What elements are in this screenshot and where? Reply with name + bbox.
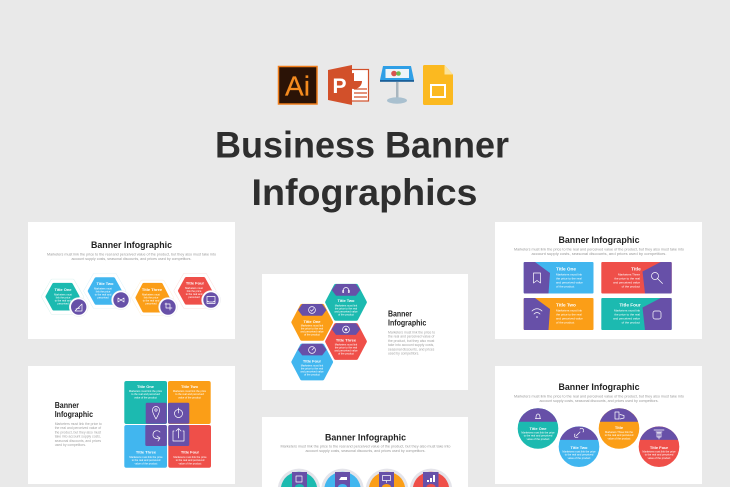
text block: take into account supply costs, <box>388 343 434 347</box>
hexagon: title two: Marketers must link <box>335 304 358 308</box>
hexagon: title three <box>132 281 178 316</box>
tile: title one <box>124 381 167 424</box>
icon: PowerPoint: P <box>332 75 347 98</box>
text block: the real and perceived value of <box>55 426 101 430</box>
hexagon: title one: of the product <box>304 332 320 336</box>
circle: title one: Title One <box>529 426 547 431</box>
hexagon: title one: perceived <box>57 302 69 306</box>
hexagon: title four: the price to the real <box>301 366 324 370</box>
text block: Marketers must link the price to <box>388 330 435 334</box>
card: title three: Title <box>631 266 641 272</box>
circle: title two <box>559 426 599 467</box>
card: title two <box>524 298 594 330</box>
circle: title one <box>518 408 558 449</box>
icon: Adobe Illustrator <box>278 66 317 104</box>
icon: Adobe Illustrator: Ai <box>285 70 310 102</box>
text block <box>514 246 684 256</box>
hexagon: title three: of the product <box>338 352 354 356</box>
card: title four: the price to the real <box>614 312 640 316</box>
circle: title four: value of the product <box>648 456 671 460</box>
text block: account supply costs, seasonal discounts, and prices used by competitors. <box>72 256 192 261</box>
tile: title two: value of the product <box>178 395 201 399</box>
hexagon: title two: the price to the real <box>335 306 358 310</box>
card: title four: and perceived value <box>613 316 640 320</box>
tile: title three: Title Three <box>136 450 157 454</box>
hexagon: title two <box>85 274 130 310</box>
tile: title two <box>168 381 211 424</box>
hexagon: title two <box>327 284 365 319</box>
heading <box>55 401 93 419</box>
circle: title four: Marketers must link the price <box>642 450 676 454</box>
hexagon: title one <box>42 280 88 316</box>
card: title two: of the product <box>556 320 575 324</box>
tile: title three: Marketers must link the price <box>129 455 163 459</box>
panel: cards <box>495 222 702 339</box>
hexagon: title four: Title Four <box>186 280 205 286</box>
text block: Marketers must link the price to the real and perceived value of the product, but they also must take into <box>514 246 684 252</box>
card: title three <box>601 262 672 294</box>
text block: account supply costs, seasonal discounts, and prices used by competitors. <box>540 398 658 403</box>
title: Business Banner <box>215 124 509 166</box>
text block: Marketers must link the price to the real and perceived value of the product, but they also must take into <box>47 252 216 256</box>
tile: title four: Marketers must link the price <box>173 455 207 459</box>
hexagon: title one: Marketers must link <box>301 324 324 328</box>
hexagon: title three <box>327 324 365 358</box>
text block <box>280 444 450 453</box>
circle: orange <box>366 469 408 487</box>
icon: Google Slides <box>423 65 453 105</box>
tile: title three: value of the product <box>135 461 158 465</box>
hexagon: title four <box>293 344 332 379</box>
text block: take into account supply costs, <box>55 435 101 439</box>
card: title three: the price to the real <box>614 276 640 280</box>
hexagon: title one: Title One <box>303 319 321 324</box>
hexagon: title four: Marketers must <box>185 286 203 290</box>
card: title one: the price to the real <box>556 276 582 280</box>
card: title two: the price to the real <box>556 312 582 316</box>
circle: title two: Title Two <box>571 445 588 450</box>
hexagon: title three: Title Three <box>336 338 357 342</box>
tile: title two: to the real and perceived <box>175 392 204 396</box>
heading: Infographic <box>55 410 93 419</box>
heading: Banner <box>388 310 412 319</box>
title <box>215 124 509 213</box>
text block: account supply costs, seasonal discounts, and prices used by competitors. <box>532 251 666 256</box>
card: title four: Marketers must link <box>614 308 640 312</box>
text block: Marketers must link the price to <box>55 422 102 426</box>
card: title one: of the product <box>556 284 575 288</box>
hexagon: title two: Marketers must <box>94 286 112 290</box>
hexagon: title three: Marketers must <box>142 292 160 296</box>
card: title four: of the product <box>622 320 640 324</box>
hexagon: title two: and perceived value <box>334 310 358 314</box>
hexagon: title four: Title Four <box>303 358 322 364</box>
hexagon: title one: Marketers must <box>54 292 72 296</box>
hexagon: title one: link the price <box>56 296 71 300</box>
circle: title four: Title Four <box>650 445 669 450</box>
tile: title two: Marketers must link the price <box>173 389 207 393</box>
tile: title three: to the real and perceived <box>132 458 161 462</box>
circle: teal <box>278 469 320 487</box>
circle: title three <box>599 408 639 449</box>
heading <box>388 310 427 328</box>
tile: title four: value of the product <box>179 461 202 465</box>
hexagon: title four: to the real and <box>186 292 203 296</box>
text block: seasonal discounts, and prices <box>388 347 435 351</box>
tile: title one: to the real and perceived <box>131 392 160 396</box>
icon: PowerPoint <box>328 65 368 105</box>
card: title two: Marketers must link <box>556 308 583 312</box>
text block: used by competitors. <box>388 352 419 356</box>
text block: Marketers must link the price to the real and perceived value of the product, but they also must take into <box>514 394 684 398</box>
hexagon: title three: perceived <box>145 302 157 306</box>
hexagon: title three: the price to the real <box>335 346 358 350</box>
hexagon: title one: to the real and <box>55 298 72 302</box>
hexagon: title three: Title Three <box>142 287 163 292</box>
hexagon: title two: perceived <box>97 296 109 300</box>
heading: Infographic <box>388 319 427 328</box>
panel: hexagon row <box>28 222 235 339</box>
circle: title two: to the real and perceived <box>565 453 594 457</box>
text block <box>55 422 102 447</box>
hexagon: title two: link the price <box>96 290 111 294</box>
circle: title four <box>639 426 679 467</box>
hexagon: title three: and perceived value <box>334 348 358 352</box>
hexagon: title four: Marketers must link <box>301 364 324 368</box>
hexagon: title four: link the price <box>187 289 202 293</box>
icon: Keynote <box>380 66 414 104</box>
card: title three: of the product <box>622 284 640 288</box>
circle: red <box>410 469 452 487</box>
tile: title four: to the real and perceived <box>176 458 205 462</box>
card: title one <box>524 262 594 294</box>
tile: title two: Title Two <box>181 384 199 389</box>
panel: honeycomb <box>262 274 468 390</box>
title: Infographics <box>252 172 478 213</box>
hexagon: title one: the price to the real <box>301 326 324 330</box>
tile: title four: Title Four <box>181 450 200 454</box>
text block: the product, but they also must <box>55 430 101 434</box>
text block <box>47 252 216 261</box>
tile: title four <box>168 425 211 468</box>
tile: title one: value of the product <box>134 395 157 399</box>
text block: the product, but they also must <box>388 339 434 343</box>
hexagon: title two: of the product <box>338 312 354 316</box>
hexagon: title one: and perceived value <box>300 330 324 334</box>
panel: circles <box>495 366 702 484</box>
heading: Banner <box>55 401 79 410</box>
circle: title three: value of the product <box>608 436 631 440</box>
heading: Banner Infographic <box>325 432 406 444</box>
card: title one: Title One <box>556 266 576 272</box>
hexagon: title four: and perceived value <box>300 370 324 374</box>
circle: title two: Marketers must link the price <box>562 450 596 454</box>
hexagon: title one: Title One <box>54 287 72 292</box>
hexagon: title three: Marketers must link <box>335 342 358 346</box>
hexagon: title four: perceived <box>188 295 200 299</box>
tile: title one: Marketers must link the price <box>129 389 163 393</box>
text block <box>388 330 435 356</box>
circle: title three: to the real and perceived <box>605 433 634 437</box>
panel: quad <box>28 366 235 484</box>
circle: title two: value of the product <box>568 456 591 460</box>
hexagon: title four: of the product <box>304 372 320 376</box>
text block: seasonal discounts, and prices <box>55 439 101 443</box>
circle: blue <box>321 469 364 487</box>
hexagon: title one <box>293 304 332 339</box>
card: title two: Title Two <box>556 302 576 308</box>
heading: Banner Infographic <box>558 235 640 246</box>
hexagon: title two: Title Two <box>338 298 355 303</box>
hexagon: title three: to the real and <box>143 298 160 302</box>
hexagon: title two: to the real and <box>95 292 112 296</box>
hexagon: title two: Title Two <box>97 281 114 286</box>
card: title two: and perceived value <box>556 316 583 320</box>
text block: account supply costs, seasonal discounts, and prices used by competitors. <box>306 448 426 453</box>
tile: title three <box>124 425 167 468</box>
hexagon: title three: link the price <box>144 296 159 300</box>
heading: Banner Infographic <box>558 382 640 393</box>
circle: title one: value of the product <box>527 437 550 441</box>
circle: title one: Marketers must link the price <box>521 430 555 434</box>
text block: Marketers must link the price to the real and perceived value of the product, but they also must take into <box>280 444 450 448</box>
text block: the real and perceived value of <box>388 335 434 339</box>
text block <box>514 394 684 403</box>
circle: title three: Marketers Three link the <box>605 430 634 434</box>
panel: circle tabs (cropped) <box>262 417 468 487</box>
tile: title one: Title One <box>137 384 155 389</box>
card: title three: Marketers Three <box>618 272 640 276</box>
card: title three: and perceived value <box>613 280 640 284</box>
card: title one: Marketers must link <box>556 272 583 276</box>
card: title four <box>601 298 672 330</box>
hexagon: title four <box>175 274 220 310</box>
circle: title three: Title <box>615 425 624 430</box>
card: title one: and perceived value <box>556 280 583 284</box>
circle: title one: to the real and perceived <box>524 434 553 438</box>
heading: Banner Infographic <box>91 240 172 251</box>
text block: used by competitors. <box>55 443 86 447</box>
circle: title four: to the real and perceived <box>645 453 674 457</box>
card: title four: Title Four <box>619 302 641 308</box>
